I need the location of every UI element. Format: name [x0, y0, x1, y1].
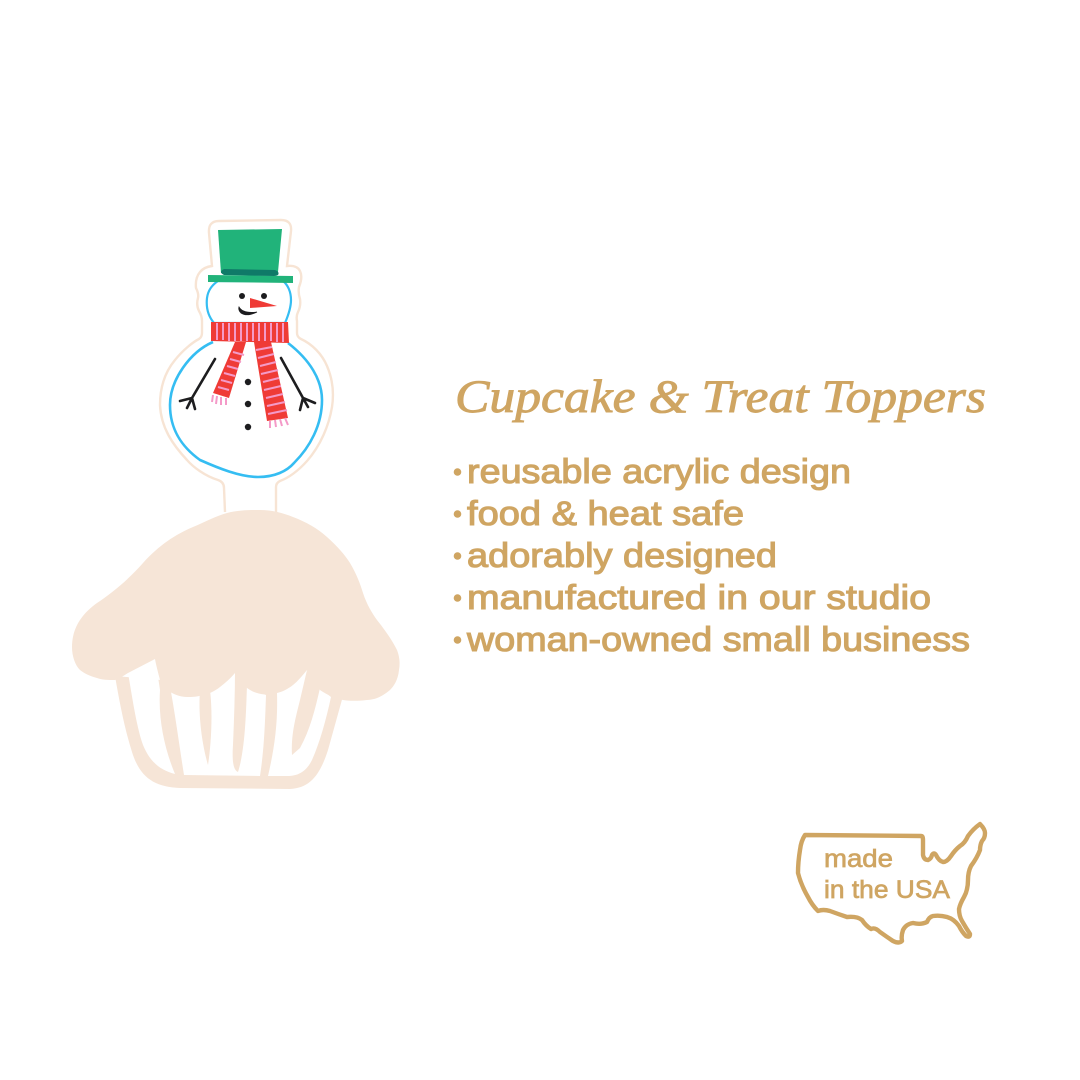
- icon: USA outline: [798, 824, 985, 942]
- topper die-cut outline: [160, 220, 333, 512]
- wrapper openings: [128, 657, 331, 776]
- feature list: [454, 453, 970, 659]
- frosting: [72, 510, 400, 701]
- badge text: made: [824, 845, 893, 873]
- buttons: [245, 379, 251, 430]
- wrapper pleats: [199, 670, 320, 772]
- cupcake wrapper: [115, 676, 343, 789]
- left arm: [180, 359, 215, 409]
- bullet: food and heat safe: food & heat safe: [467, 495, 744, 533]
- right arm: [281, 358, 315, 410]
- hat: [208, 229, 293, 283]
- badge: made in the USA: [798, 824, 985, 942]
- badge text: in the USA: [824, 876, 950, 904]
- bullet: manufactured in our studio: manufactured in our studio: [467, 579, 931, 617]
- bullet: adorably designed: adorably designed: [467, 537, 777, 575]
- scarf: [211, 322, 289, 428]
- scarf right tail: [254, 342, 288, 428]
- snowman body: [170, 342, 322, 477]
- scarf left tail: [212, 342, 246, 405]
- illustration: snowman topper on cupcake: [72, 220, 400, 789]
- bullet: woman-owned small business: woman-owned small business: [466, 621, 970, 659]
- snowman head: [207, 281, 291, 323]
- badge text: [824, 845, 950, 904]
- cupcake: [72, 510, 400, 789]
- face: [239, 293, 277, 315]
- heading: Cupcake & Treat Toppers: [455, 371, 986, 423]
- scarf neck band: [211, 322, 289, 343]
- bullet: reusable acrylic design: reusable acrylic design: [467, 453, 851, 491]
